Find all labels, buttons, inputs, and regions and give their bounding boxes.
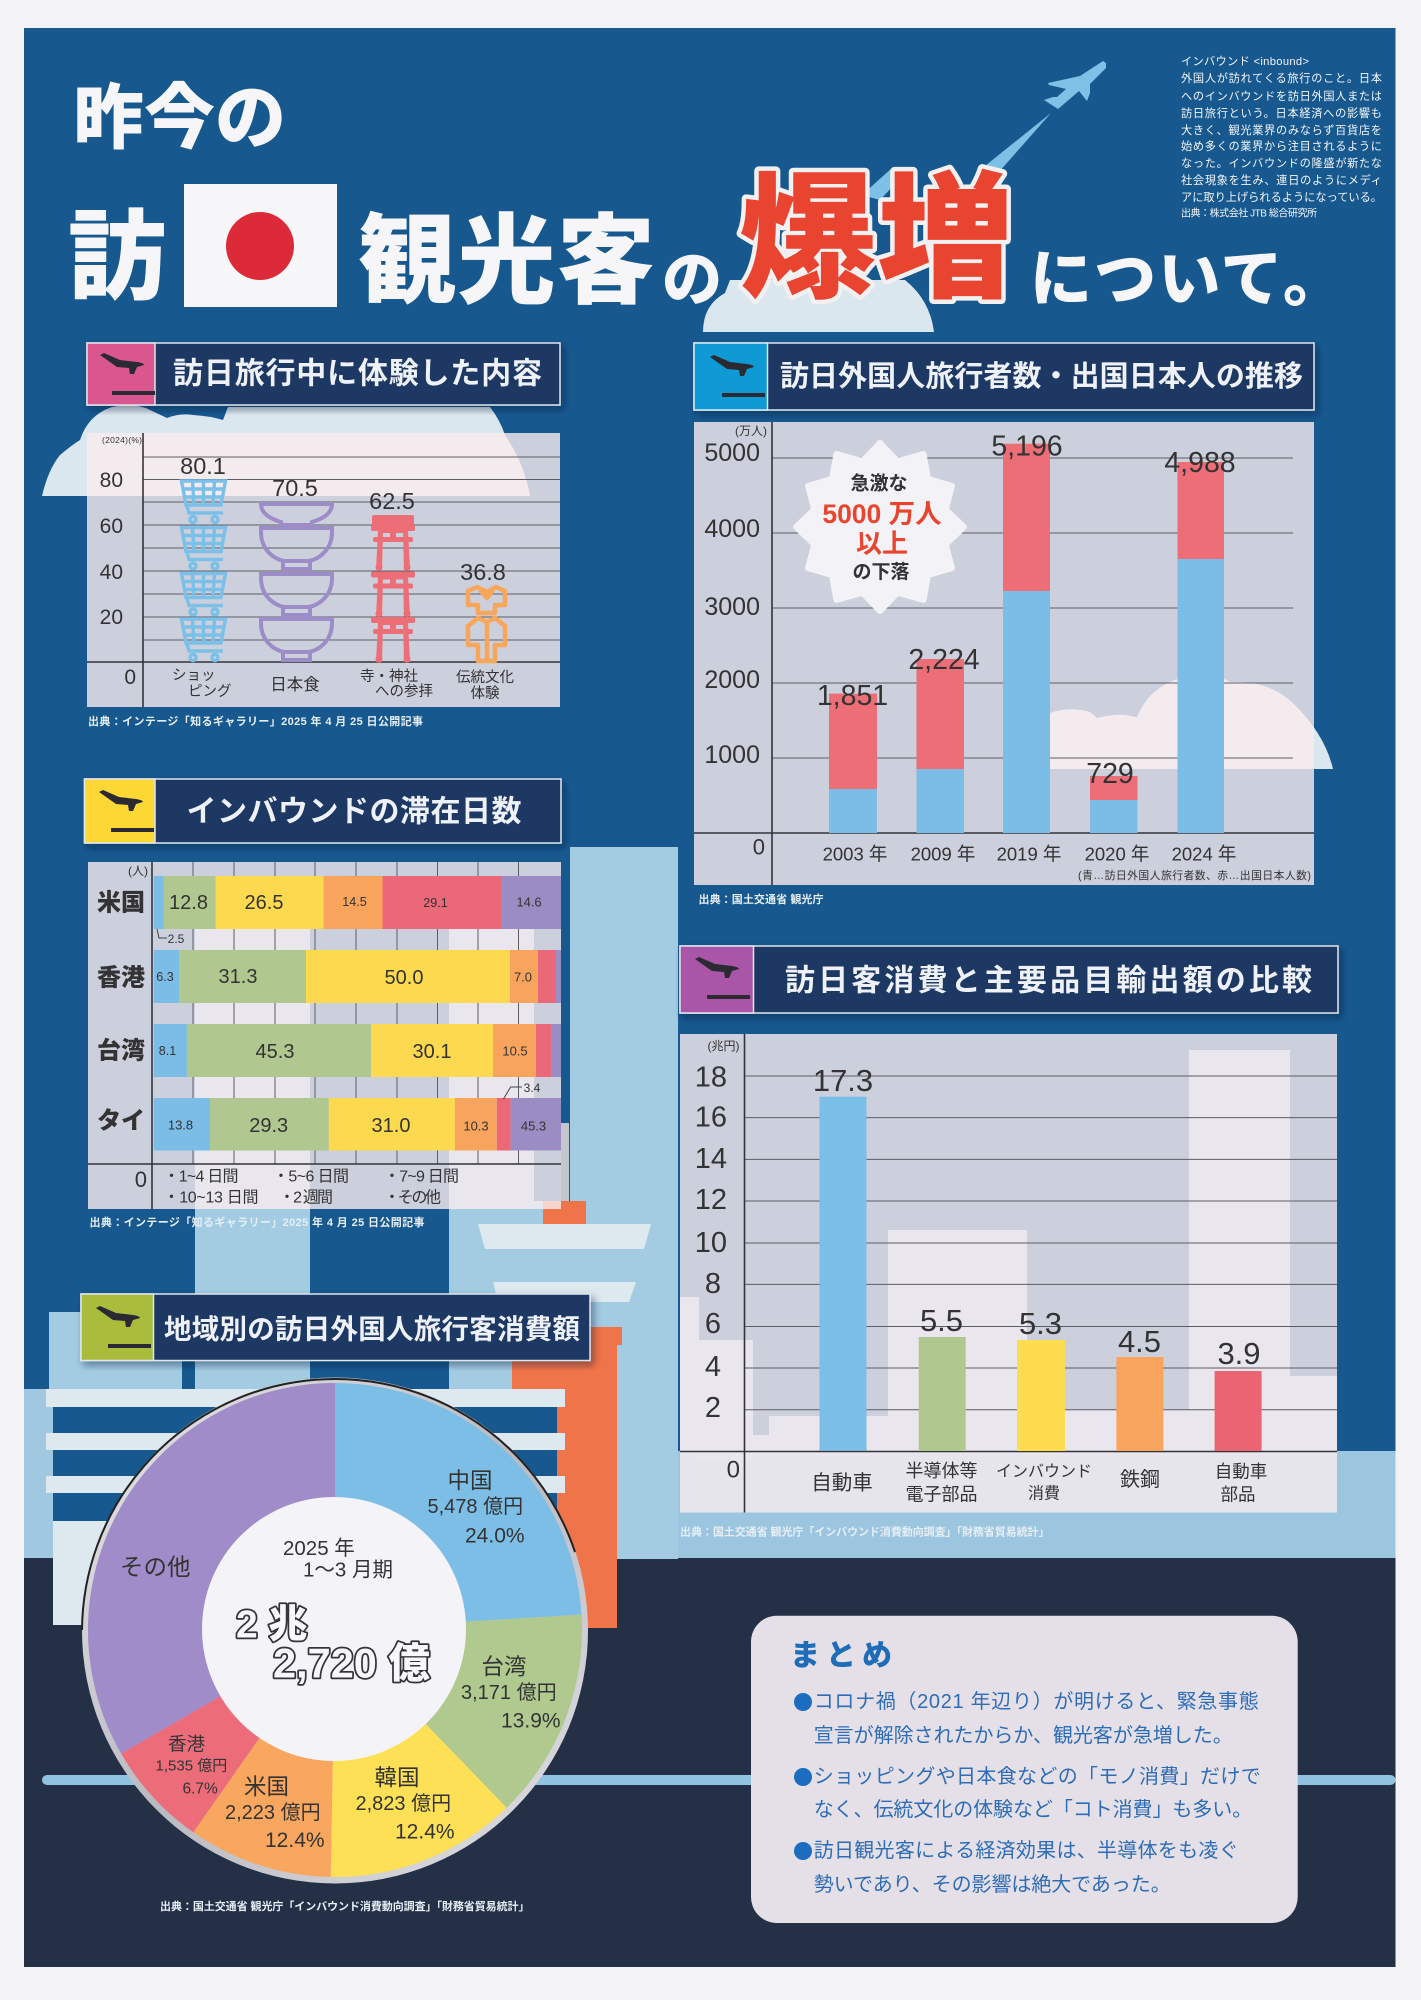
category labels: 日本食 [270, 675, 320, 694]
pictogram: rice bowls [261, 504, 332, 660]
heading: activities during visit: 訪日旅行中に体験した内容 [173, 358, 542, 390]
source: visitors: 出典：国土交通省 観光庁 [698, 892, 824, 906]
label: Taiwan: 台湾 [481, 1654, 527, 1680]
summary point 2: ショッピングや日本食などの「モノ消費」だけで [814, 1765, 1261, 1788]
segment: other [88, 1383, 335, 1754]
segment: China [335, 1383, 582, 1630]
y axis labels: 4 [705, 1351, 721, 1383]
category labels: 2003 年 [823, 844, 887, 864]
label: China: 24.0% [465, 1524, 525, 1548]
value labels: 3.9 [1217, 1336, 1261, 1371]
country labels: タイ [97, 1108, 145, 1134]
legend: (人) [128, 864, 148, 878]
y axis labels: 3000 [704, 593, 760, 621]
label: Taiwan: 3,171 億円 [461, 1681, 557, 1704]
y axis labels: 10 [695, 1227, 727, 1259]
y axis labels: 2 [705, 1392, 721, 1424]
panel: summary [751, 1616, 1298, 1923]
category labels: 2019 年 [997, 844, 1061, 864]
y axis labels: (万人) [735, 424, 767, 438]
text block: inbound definition: 訪日旅行という。日本経済への影響も [1181, 106, 1382, 120]
label: Korea: 韓国 [374, 1766, 420, 1790]
label: Korea: 2,823 億円 [356, 1792, 451, 1815]
row: Taiwan: 30.1 [413, 1041, 451, 1063]
y axis labels: 20 [100, 606, 123, 629]
value labels [817, 430, 1236, 790]
legend: ・5~6 日間 [273, 1168, 349, 1186]
clouds [42, 280, 1333, 769]
row: Thailand: 13.8 [168, 1118, 193, 1132]
category labels: 鉄鋼 [1120, 1468, 1160, 1491]
value labels: 729 [1086, 758, 1134, 790]
row: USA: 2.5 [168, 932, 185, 946]
control tower [478, 1201, 651, 1628]
y axis labels: 18 [695, 1062, 727, 1094]
heading: consumption vs exports: 訪日客消費と主要品目輸出額の比較 [785, 964, 1312, 998]
text block: inbound definition: 始め多くの業界から注目されるように [1181, 139, 1382, 153]
row: Hong Kong: 7.0 [514, 970, 532, 984]
y axis labels: 8 [705, 1268, 721, 1300]
category labels: への参拝 [375, 683, 433, 700]
label: Hong Kong: 6.7% [182, 1780, 218, 1798]
legend: ・その他 [384, 1188, 441, 1206]
category labels: 寺・神社 [360, 668, 418, 685]
row: Hong Kong [154, 950, 561, 1003]
text block: inbound definition: へのインバウンドを訪日外国人または [1181, 90, 1382, 103]
label: Korea: 12.4% [395, 1820, 455, 1844]
text block: inbound definition [1181, 55, 1382, 220]
category labels [823, 844, 1311, 882]
row: Taiwan: 45.3 [256, 1041, 294, 1063]
heading: visitors vs departures [694, 343, 1314, 410]
y axis labels: 5000 [704, 439, 760, 467]
summary point 3: 勢いであり、その影響は絶大であった。 [814, 1873, 1171, 1896]
title: について。 [1030, 246, 1345, 314]
panel: visitors vs departures bar chart [694, 422, 1314, 885]
summary point 2 [794, 1765, 1261, 1821]
row: Thailand: 10.3 [463, 1118, 489, 1134]
summary point 3: 訪日観光客による経済効果は、半導体をも凌ぐ [814, 1839, 1239, 1862]
panel: activities pictogram chart [87, 433, 560, 707]
source: region: 出典：国土交通省 観光庁「インバウンド消費動向調査」「財務省貿易統計」 [160, 1899, 530, 1913]
heading: consumption vs exports [680, 946, 1338, 1013]
category labels: 自動車 [1215, 1462, 1267, 1482]
y axis labels: 0 [124, 666, 136, 689]
callout: starburst: 以上 [856, 528, 908, 558]
label: China: 中国 [447, 1468, 493, 1494]
pictogram: kimono [468, 587, 505, 661]
y axis labels: 80 [100, 469, 123, 492]
y axis labels: 40 [100, 561, 123, 584]
category labels: 2009 年 [911, 844, 975, 864]
source: exports: 出典：国土交通省 観光庁「インバウンド消費動向調査」「財務省貿易統計」 [680, 1524, 1050, 1538]
country labels [97, 890, 145, 1134]
value labels: 2,224 [908, 644, 980, 676]
text block: inbound definition: アに取り上げられるようになっている。 [1181, 191, 1382, 204]
y axis labels: 4000 [704, 515, 760, 543]
y axis labels: 0 [753, 834, 765, 860]
donut chart: spending by region [82, 1378, 588, 1884]
summary point 1: コロナ禍（2021 年辺り）が明けると、緊急事態 [814, 1690, 1259, 1713]
y axis labels: 16 [695, 1102, 727, 1134]
callout: starburst [796, 443, 964, 611]
value labels: 80.1 [180, 453, 226, 479]
row: Taiwan [154, 1024, 561, 1077]
row: Thailand [154, 1081, 561, 1150]
value labels: 4,988 [1164, 447, 1236, 479]
value labels: 5,196 [991, 430, 1063, 462]
text block: inbound definition: インバウンド <inbound> [1181, 55, 1309, 68]
heading: visitors vs departures: 訪日外国人旅行者数・出国日本人の推移 [780, 360, 1303, 393]
y axis labels [100, 435, 142, 689]
center total: 2025 年 [283, 1537, 355, 1560]
bars [829, 444, 1224, 833]
value labels: 4.5 [1118, 1324, 1161, 1359]
label: USA: 12.4% [265, 1829, 325, 1852]
label: USA [225, 1774, 325, 1852]
legend [128, 864, 459, 1206]
value labels [813, 1063, 1261, 1371]
summary point 1 [794, 1690, 1259, 1747]
summary heading: まとめ [790, 1640, 892, 1672]
label: other: その他 [120, 1554, 190, 1580]
heading: length of stay [84, 779, 561, 843]
legend: ・1~4 日間 [164, 1168, 238, 1186]
value labels: 5.5 [920, 1303, 963, 1338]
value labels: 5.3 [1019, 1306, 1062, 1341]
legend: ・7~9 日間 [384, 1168, 459, 1186]
country labels: 米国 [97, 890, 145, 916]
title: 訪 [68, 202, 166, 312]
category labels: 自動車 [811, 1472, 873, 1494]
category labels: 伝統文化 [456, 669, 514, 686]
category labels [172, 668, 514, 702]
row: USA: 26.5 [245, 892, 283, 914]
y axis labels: 6 [705, 1308, 721, 1340]
category labels: 半導体等 [906, 1461, 978, 1481]
row: Thailand: 29.3 [249, 1115, 288, 1137]
category labels: ショッ [172, 668, 216, 684]
legend: ・2 週間 [279, 1188, 333, 1206]
row: Thailand: 31.0 [372, 1115, 410, 1137]
row: Taiwan: 10.5 [502, 1044, 528, 1058]
heading: spending by region [81, 1294, 590, 1360]
y axis labels: (2024)(%) [102, 435, 142, 445]
category labels: (青…訪日外国人旅行者数、赤…出国日本人数) [1078, 868, 1311, 882]
segment: Korea [331, 1630, 507, 1877]
y axis labels: 1000 [704, 741, 760, 769]
title: の [662, 246, 722, 314]
value labels: 62.5 [369, 488, 415, 514]
icon: rising airplane with contrail [862, 61, 1106, 200]
label: Hong Kong: 香港 [168, 1734, 205, 1754]
label: Korea [356, 1766, 455, 1844]
panel: length of stay stacked bars [88, 862, 561, 1209]
panel: consumption vs exports bar chart [680, 1034, 1337, 1512]
y axis labels: 14 [695, 1143, 727, 1175]
category labels: 2020 年 [1085, 844, 1149, 864]
category labels: 2024 年 [1172, 844, 1236, 864]
row: Taiwan: 8.1 [159, 1044, 176, 1058]
center total [236, 1537, 430, 1686]
y axis labels [704, 424, 767, 860]
row: Thailand: 45.3 [521, 1118, 546, 1134]
heading: length of stay: インバウンドの滞在日数 [186, 796, 522, 828]
summary point 3 [794, 1839, 1239, 1896]
label: Hong Kong [156, 1734, 227, 1798]
country labels: 香港 [97, 964, 145, 992]
heading: spending by region: 地域別の訪日外国人旅行客消費額 [164, 1314, 580, 1344]
center total: 2,720 億 [273, 1640, 430, 1686]
callout: starburst: 5000 万人 [822, 499, 942, 529]
source: activities: 出典：インテージ「知るギャラリー」2025 年 4 月 25 日公開記事 [88, 714, 423, 728]
label: China: 5,478 億円 [428, 1495, 523, 1518]
category labels: 部品 [1220, 1484, 1256, 1504]
category labels: ピング [188, 683, 232, 700]
pictogram: torii gates [371, 515, 415, 662]
skyline buildings [49, 847, 1337, 1559]
value labels: 1,851 [817, 680, 888, 712]
y axis labels: 12 [695, 1184, 727, 1216]
callout: starburst: 急激な [850, 472, 908, 494]
row: Hong Kong: 6.3 [156, 970, 174, 984]
text block: inbound definition: なった。インバウンドの隆盛が新たな [1181, 156, 1382, 170]
pictogram: shopping carts [182, 481, 226, 660]
value labels [180, 453, 506, 585]
label: Taiwan [461, 1654, 561, 1732]
title: 観光客 [358, 206, 655, 316]
category labels [811, 1461, 1267, 1504]
value labels: 36.8 [460, 559, 506, 585]
y axis labels [695, 1039, 740, 1484]
row: USA: 29.1 [423, 896, 448, 910]
center total: 2 兆 [236, 1604, 308, 1646]
value labels: 17.3 [813, 1063, 873, 1098]
title: 爆増 [739, 164, 1014, 316]
legend: 0 [135, 1167, 147, 1192]
country labels: 台湾 [97, 1036, 145, 1064]
text block: inbound definition: 外国人が訪れてくる旅行のこと。日本 [1181, 71, 1382, 85]
bars [820, 1097, 1262, 1451]
segment: Hong Kong [121, 1630, 335, 1832]
category labels: 消費 [1028, 1484, 1060, 1502]
y axis labels: 0 [727, 1456, 740, 1484]
runway line [42, 1775, 1396, 1785]
title: 昨今の [73, 80, 286, 158]
y axis labels: 2000 [704, 666, 760, 694]
donut hole [202, 1497, 466, 1761]
category labels: 電子部品 [906, 1484, 978, 1504]
text block: inbound definition: 大きく、観光業界のみならず百貨店を [1181, 123, 1382, 137]
label: China [428, 1468, 525, 1548]
value labels: 70.5 [272, 475, 318, 501]
text block: inbound definition: 社会現象を生み、連日のようにメディ [1181, 173, 1382, 187]
heading: activities during visit [87, 343, 560, 405]
row: USA: 12.8 [169, 892, 208, 914]
source: stay: 出典：インテージ「知るギャラリー」2025 年 4 月 25 日公開記事 [90, 1215, 424, 1229]
row: Hong Kong: 50.0 [385, 967, 423, 989]
text block: inbound definition: 出典：株式会社 JTB 総合研究所 [1181, 206, 1317, 220]
legend: ・10~13 日間 [164, 1190, 258, 1206]
segment: Taiwan [335, 1614, 582, 1808]
y axis labels: 60 [100, 515, 123, 538]
label: Taiwan: 13.9% [501, 1710, 561, 1732]
center total: 1〜3 月期 [303, 1558, 393, 1582]
row: USA [154, 876, 561, 946]
label: USA: 米国 [244, 1774, 289, 1800]
terminal building [46, 1389, 565, 1625]
label: USA: 2,223 億円 [225, 1801, 321, 1824]
category labels: インバウンド [996, 1462, 1092, 1480]
summary point 2: なく、伝統文化の体験など「コト消費」も多い。 [814, 1798, 1252, 1821]
y axis labels: (兆円) [708, 1039, 740, 1053]
row: USA: 14.6 [516, 894, 542, 910]
title [68, 80, 1345, 316]
label: Hong Kong: 1,535 億円 [156, 1758, 227, 1774]
category labels: 体験 [470, 685, 500, 702]
callout: starburst: の下落 [852, 561, 910, 583]
summary point 1: 宣言が解除されたからか、観光客が急増した。 [814, 1724, 1233, 1747]
row: Hong Kong: 31.3 [219, 966, 257, 988]
row: USA: 14.5 [342, 895, 367, 909]
row: Thailand: 3.4 [524, 1081, 541, 1095]
segment: USA [193, 1630, 335, 1877]
